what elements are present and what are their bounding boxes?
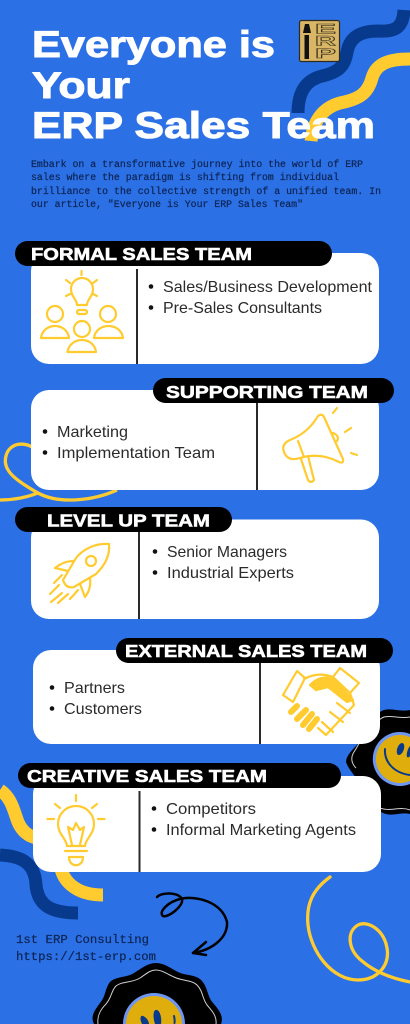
heading: external sales team: EXTERNAL SALES TEAM: [125, 641, 367, 661]
heading: formal sales team: FORMAL SALES TEAM: [31, 244, 252, 264]
list: creative sales team: [152, 801, 356, 839]
heading: formal sales team: [15, 241, 332, 266]
heading: level up team: [15, 507, 232, 532]
smiley badge bottom: [93, 963, 222, 1024]
list: formal sales team: [149, 279, 373, 317]
decoration: navy wave top right: [298, 10, 404, 113]
list: external sales team: [50, 680, 142, 718]
list: level up team: Senior Managers: [167, 544, 287, 561]
arrow: curly black arrow: [157, 893, 227, 955]
panel: external sales team: [33, 638, 393, 744]
intro paragraph: Embark on a transformative journey into the world of ERP: [31, 159, 363, 171]
title: Your: [32, 65, 130, 106]
list: external sales team: Partners: [64, 680, 125, 697]
list: level up team: [153, 544, 294, 582]
intro paragraph: brilliance to the collective strength of a unified team. In: [31, 186, 381, 198]
heading: level up team: LEVEL UP TEAM: [47, 510, 210, 530]
list: level up team: Industrial Experts: [167, 565, 294, 582]
footer: company name and url: 1st ERP Consulting: [16, 933, 149, 947]
list: supporting team: Implementation Team: [57, 445, 215, 462]
decoration: yellow wave top right: [311, 59, 410, 141]
decoration: yellow loop left: [0, 444, 117, 500]
smiley badge right: [346, 709, 410, 815]
icon: rocket: [50, 544, 109, 603]
list: creative sales team: Informal Marketing Agents: [166, 822, 356, 839]
intro paragraph: our article, "Everyone is Your ERP Sales Team": [31, 199, 303, 211]
logo: ERP: E: [315, 20, 336, 36]
footer: company name and url: [16, 933, 156, 964]
intro paragraph: sales where the paradigm is shifting from individual: [31, 172, 339, 184]
intro paragraph: [31, 159, 381, 211]
list: supporting team: Marketing: [57, 424, 128, 441]
heading: external sales team: [116, 638, 393, 663]
decoration: yellow wave bottom left: [0, 790, 103, 895]
panel: formal sales team: [15, 241, 379, 364]
decoration: yellow spiral right: [308, 877, 410, 982]
icon: team with light bulb: [41, 271, 123, 352]
heading: creative sales team: [18, 763, 341, 788]
title: ERP Sales Team: [32, 105, 375, 146]
list: external sales team: Customers: [64, 701, 142, 718]
footer: company name and url: https://1st-erp.com: [16, 950, 156, 964]
list: formal sales team: Sales/Business Development: [163, 279, 373, 296]
list: formal sales team: Pre-Sales Consultants: [163, 300, 322, 317]
heading: supporting team: SUPPORTING TEAM: [166, 382, 368, 402]
logo: ERP: P: [315, 45, 336, 61]
icon: handshake: [283, 668, 359, 735]
panel: supporting team: [31, 378, 394, 490]
logo: ERP: R: [315, 32, 336, 48]
list: supporting team: [43, 424, 215, 462]
decoration: navy wave bottom left: [0, 855, 78, 913]
panel: level up team: [15, 507, 379, 619]
logo: ERP: [300, 20, 340, 62]
panel: creative sales team: [18, 763, 381, 872]
list: creative sales team: Competitors: [166, 801, 256, 818]
title: [32, 24, 375, 146]
icon: light bulb with flame: [48, 795, 104, 865]
title: Everyone is: [32, 24, 275, 65]
icon: megaphone: [283, 408, 357, 482]
heading: creative sales team: CREATIVE SALES TEAM: [27, 766, 267, 786]
heading: supporting team: [153, 378, 394, 403]
